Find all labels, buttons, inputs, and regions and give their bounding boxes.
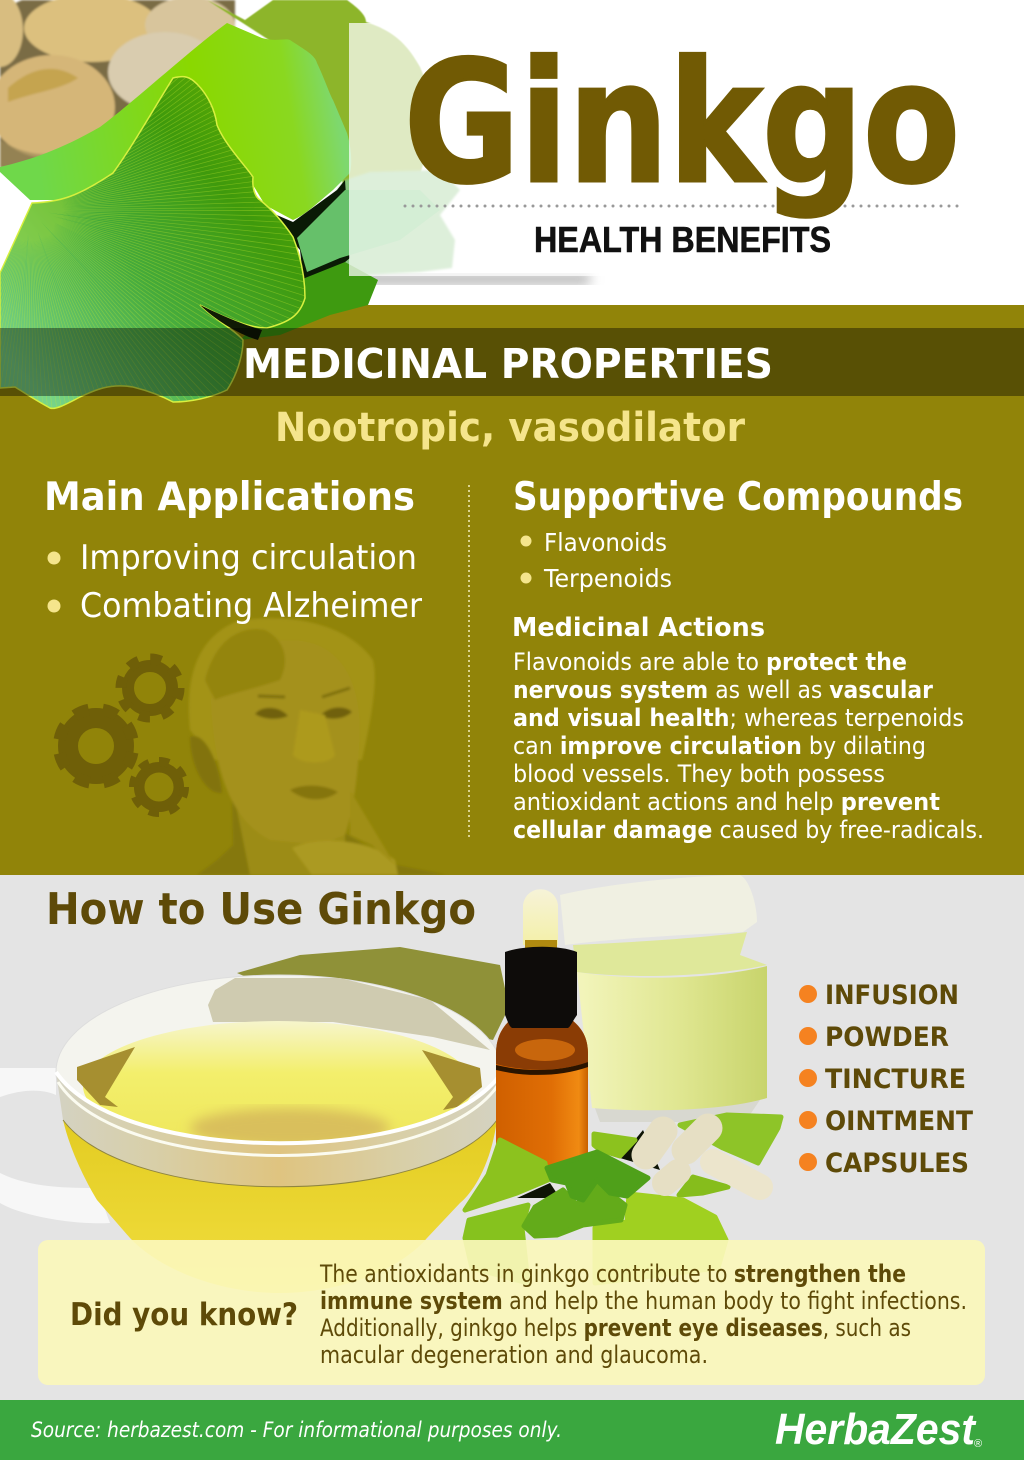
cup rim (56, 1072, 502, 1143)
dark gaps between leaves (265, 180, 350, 295)
cup glass (56, 975, 502, 1169)
powder seen through glass (208, 978, 490, 1050)
top gear (121, 659, 179, 717)
footer (0, 1400, 1024, 1460)
callout background (38, 1240, 985, 1385)
column: supportive compounds (512, 475, 984, 844)
icon: thinking man (189, 618, 447, 875)
subtitle: HEALTH BENEFITS (534, 219, 831, 260)
footer bar (0, 1400, 1024, 1460)
heading: supportive compounds: Supportive Compounds (513, 475, 963, 520)
icon: gears (53, 659, 184, 812)
man eyes (255, 707, 352, 719)
ghost lower leaves (300, 170, 460, 276)
heading: how to use ginkgo: How to Use Ginkgo (46, 884, 476, 935)
shadow under leaves (350, 274, 590, 284)
large gear (53, 703, 139, 789)
medicinal actions paragraph (513, 648, 984, 844)
illustration: tincture bottle (496, 889, 588, 1165)
man mouth (290, 786, 338, 799)
medicinal actions paragraph: blood vessels. They both possess (513, 760, 885, 788)
man hair (189, 618, 375, 760)
column: main applications (44, 475, 422, 626)
cup front glass band (56, 1072, 502, 1187)
medicinal actions paragraph: and visual health; whereas terpenoids (513, 704, 964, 732)
panel: medicinal properties background (0, 305, 1024, 875)
man shoulders and neck (200, 806, 434, 874)
jar neck (573, 932, 767, 976)
man hand at chin (292, 841, 398, 875)
callout text: macular degeneration and glaucoma. (320, 1341, 708, 1369)
compounds list: Flavonoids (544, 528, 667, 557)
medicinal actions paragraph: Flavonoids are able to protect the (513, 648, 907, 676)
tea surface (83, 1021, 473, 1151)
capsules: CAPSULES (825, 1148, 969, 1179)
medicinal actions paragraph: can improve circulation by dilating (513, 732, 926, 760)
cup inner reflections (77, 1047, 482, 1110)
bottle shoulder (496, 1020, 588, 1070)
callout: did you know (38, 1240, 985, 1385)
illustration: ginkgo leaves (465, 1115, 781, 1283)
callout text (319, 1260, 967, 1369)
pipette bulb (523, 889, 558, 945)
leaf notch (200, 305, 262, 340)
bottle body (496, 1020, 588, 1165)
section band (0, 328, 1024, 396)
leaf centre top (547, 1152, 648, 1200)
bottom gear (134, 762, 184, 812)
medicinal actions paragraph: cellular damage caused by free-radicals. (513, 816, 984, 844)
leaf lower right (595, 1194, 726, 1283)
man eyebrows (258, 688, 350, 697)
medicinal actions paragraph: nervous system as well as vascular (513, 676, 933, 704)
leaf veins (0, 50, 190, 370)
compounds list (520, 528, 672, 593)
illustration: capsules (646, 1128, 760, 1187)
leaf behind pills (594, 1134, 635, 1156)
man nose (295, 712, 333, 761)
man hand at forehead (205, 629, 285, 700)
leaf left large (465, 1140, 548, 1210)
illustration: powder mound (237, 947, 509, 1040)
heading: medicinal properties: MEDICINAL PROPERTIES (243, 340, 773, 388)
jar base (592, 1100, 760, 1122)
panel: how to use (0, 875, 1024, 1400)
jar lid (560, 875, 757, 945)
jar body (577, 966, 767, 1110)
callout heading: Did you know? (70, 1297, 298, 1333)
cup handle (0, 1068, 110, 1223)
column divider (468, 486, 470, 840)
bullet list (48, 538, 422, 626)
bullet list: Combating Alzheimer (80, 586, 422, 626)
subheading: nootropic, vasodilator: Nootropic, vasodilator (275, 405, 745, 451)
infusion: INFUSION (825, 980, 959, 1011)
callout text: The antioxidants in ginkgo contribute to strengthen the (319, 1260, 906, 1288)
dotted title rule (405, 204, 960, 208)
tincture: TINCTURE (825, 1064, 966, 1095)
medicinal actions paragraph: antioxidant actions and help prevent (513, 788, 940, 816)
translucent title panel (349, 23, 1024, 276)
uses list (799, 980, 974, 1179)
ointment: OINTMENT (825, 1106, 974, 1137)
leaf centre lower (524, 1180, 625, 1236)
source note: Source: herbazest.com - For informational purposes only. (31, 1418, 562, 1442)
back leaf (207, 0, 433, 200)
heading: main applications: Main Applications (44, 475, 415, 520)
middle leaf (0, 23, 351, 220)
lower leaf (297, 190, 440, 272)
bottle cap (505, 947, 577, 1028)
cup liquid body (63, 1120, 497, 1293)
dark shadow gaps (517, 1130, 730, 1198)
logo: herbazest: ® (974, 1438, 982, 1450)
heading: medicinal actions: Medicinal Actions (512, 613, 765, 643)
compounds list: Terpenoids (543, 564, 672, 593)
powder: POWDER (825, 1022, 949, 1053)
callout text: Additionally, ginkgo helps prevent eye diseases, such as (320, 1314, 911, 1342)
leaf lower left (465, 1205, 528, 1283)
seeds (0, 0, 235, 168)
logo: herbazest: HerbaZest (775, 1405, 977, 1454)
leaf right top (680, 1115, 781, 1163)
leaf under pills (679, 1177, 728, 1195)
header leaf and seed photo (0, 0, 1024, 408)
reflection centre (190, 1108, 390, 1148)
bullet list: Improving circulation (80, 538, 417, 578)
man face (211, 640, 360, 845)
illustration: ointment jar (560, 875, 767, 1122)
illustration: tea cup (0, 975, 502, 1293)
man ear (190, 736, 222, 793)
main ginkgo leaf (0, 77, 305, 408)
